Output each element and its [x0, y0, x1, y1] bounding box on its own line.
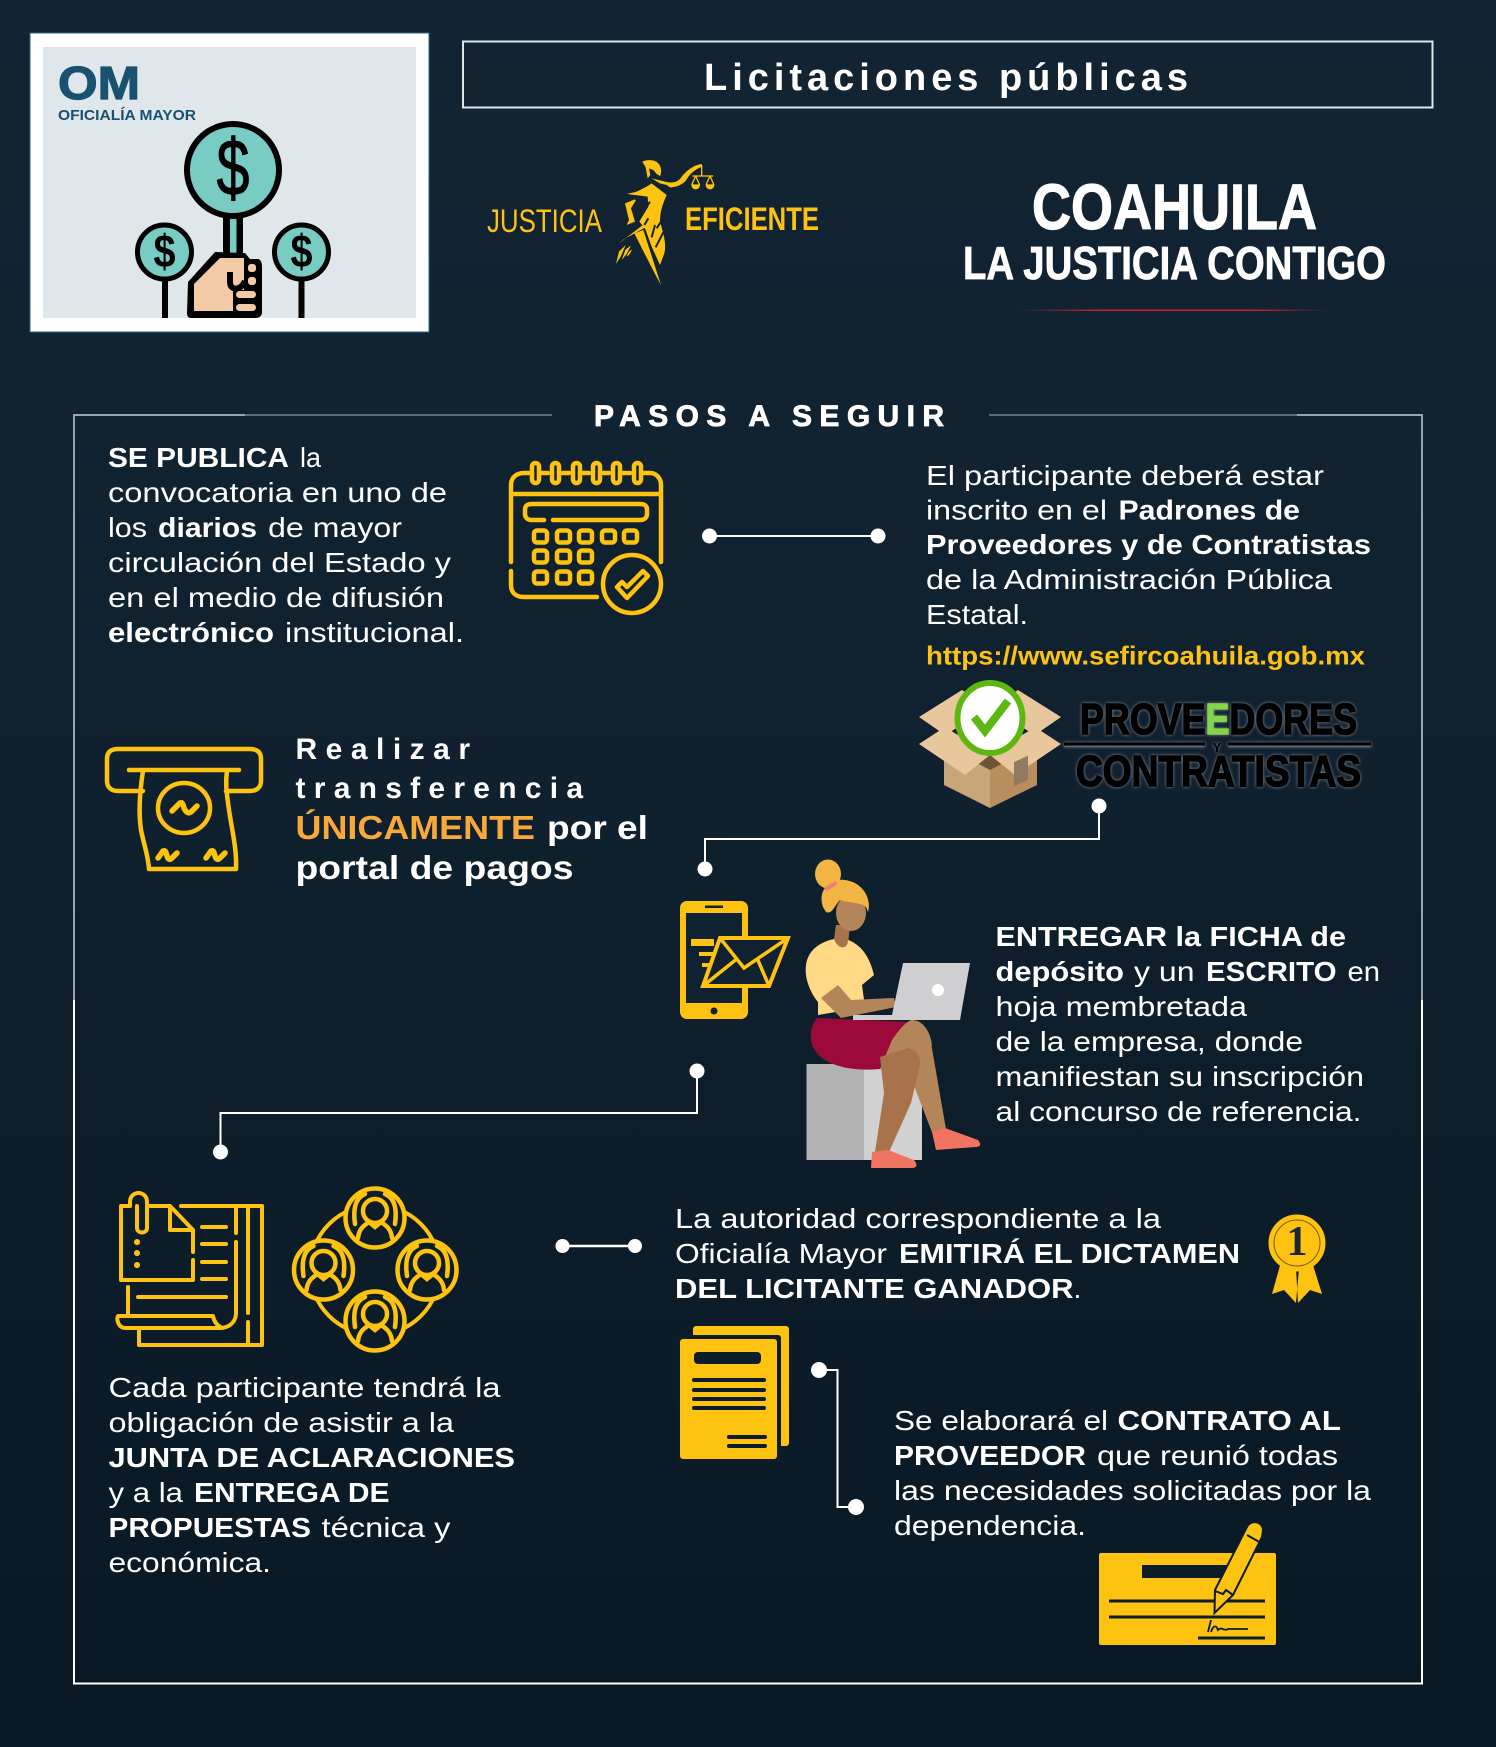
- text: contrato: [894, 1405, 1371, 1541]
- icon: lady justice: [616, 160, 714, 285]
- icon: proveedores box: [919, 683, 1061, 808]
- title box: [463, 42, 1432, 108]
- text: cada participante: ENTREGA DE: [194, 1477, 390, 1508]
- text: cada participante: económica.: [108, 1547, 271, 1578]
- panel: logo card: [30, 33, 429, 332]
- text: contrato: que reunió todas: [1097, 1440, 1338, 1471]
- text: realizar transferencia: transferencia: [296, 772, 583, 805]
- logo: proveedores y contratistas: Y: [1213, 740, 1222, 755]
- text: cada participante: PROPUESTAS: [108, 1512, 311, 1543]
- heading: Coahuila la justicia contigo: COAHUILA: [1032, 171, 1317, 243]
- icon: contract signature: [1099, 1522, 1276, 1645]
- OM logo text: OFICIALÍA MAYOR: [58, 107, 196, 124]
- icon: hand holding dollar signs: $: [216, 123, 250, 212]
- text: cada participante: y a la: [108, 1477, 183, 1508]
- icon: hand holding dollar signs: $: [290, 225, 312, 277]
- OM logo text: [58, 57, 196, 124]
- heading: pasos a seguir: PASOS A SEGUIR: [594, 400, 944, 433]
- text: se publica: en el medio de difusión: [108, 582, 444, 613]
- text: dictamen: EMITIRÁ EL DICTAMEN: [899, 1238, 1240, 1269]
- text: se publica: [108, 442, 464, 648]
- text: padrones: El participante deberá estar: [926, 460, 1324, 491]
- text: entregar ficha: de la empresa, donde: [996, 1026, 1303, 1057]
- text: entregar ficha: al concurso de referencia.: [996, 1096, 1362, 1127]
- arrow: connector 3: [213, 1064, 704, 1160]
- panel: pasos a seguir frame: [74, 415, 1422, 1684]
- text: contrato: Se elaborará el: [894, 1405, 1108, 1436]
- text: dictamen: .: [1074, 1273, 1081, 1304]
- link: https://www.sefircoahuila.gob.mx: [926, 640, 1366, 670]
- text: cada participante: Cada participante tendrá la: [108, 1372, 501, 1403]
- OM logo text: OM: [58, 57, 140, 109]
- text: dictamen: La autoridad correspondiente a la: [675, 1203, 1161, 1234]
- text: cada participante: [108, 1372, 515, 1578]
- text: se publica: los: [108, 512, 147, 543]
- logo: proveedores y contratistas: PROVEEDORES: [1080, 695, 1357, 744]
- text: realizar transferencia: Realizar: [296, 733, 470, 766]
- text: dictamen: Oficialía Mayor: [675, 1238, 887, 1269]
- text: se publica: de mayor: [268, 512, 402, 543]
- text: entregar ficha: en: [1348, 956, 1380, 987]
- text: padrones: [926, 460, 1371, 670]
- text: contrato: CONTRATO AL: [1118, 1405, 1341, 1436]
- text: entregar ficha: y un: [1134, 956, 1194, 987]
- text: se publica: institucional.: [285, 617, 464, 648]
- icon: first place medal: 1: [1286, 1219, 1308, 1265]
- arrow: connector 2: [698, 798, 1106, 876]
- icon: first place medal: [1271, 1217, 1323, 1303]
- text: padrones: inscrito en el: [926, 494, 1107, 526]
- text: realizar transferencia: ÚNICAMENTE: [296, 809, 535, 846]
- illustration: woman with laptop: [806, 860, 980, 1168]
- text: contrato: PROVEEDOR: [894, 1440, 1086, 1471]
- text: entregar ficha: [996, 921, 1380, 1127]
- text: cada participante: JUNTA DE ACLARACIONES: [108, 1442, 515, 1473]
- icon: phone with envelope: [680, 901, 788, 1019]
- icon: hand holding dollar signs: [138, 123, 328, 318]
- heading: Coahuila la justicia contigo: LA JUSTICIA CONTIGO: [963, 237, 1386, 289]
- text: se publica: diarios: [158, 512, 257, 543]
- logo: proveedores y contratistas: CONTRATISTAS: [1076, 747, 1361, 796]
- text: contrato: las necesidades solicitadas por la: [894, 1475, 1371, 1506]
- text: se publica: electrónico: [108, 617, 274, 648]
- text: realizar transferencia: portal de pagos: [296, 849, 574, 886]
- arrow: connector 4: [556, 1239, 642, 1253]
- arrow: connector 1: [702, 528, 886, 544]
- icon: calendar: [511, 463, 661, 613]
- text: padrones: Proveedores y de Contratistas: [926, 529, 1371, 560]
- text: realizar transferencia: [296, 733, 648, 886]
- text: se publica: convocatoria en uno de: [108, 477, 447, 508]
- text: dictamen: [675, 1203, 1240, 1304]
- text: entregar ficha: manifiestan su inscripción: [996, 1061, 1364, 1092]
- icon: atm money: [107, 749, 261, 869]
- text: padrones: Padrones de: [1118, 494, 1300, 526]
- logo: proveedores y contratistas: [1064, 695, 1371, 796]
- logo: justicia eficiente: [487, 160, 819, 285]
- text: padrones: Estatal.: [926, 599, 1028, 630]
- text: entregar ficha: ESCRITO: [1206, 956, 1336, 987]
- text: se publica: SE PUBLICA: [108, 442, 289, 473]
- icon: paper stack: [677, 1326, 789, 1463]
- logo: justicia eficiente: EFICIENTE: [685, 201, 819, 237]
- icon: documents: [117, 1193, 262, 1345]
- icon: four participants: [294, 1188, 456, 1350]
- text: contrato: dependencia.: [894, 1510, 1086, 1541]
- text: entregar ficha: hoja membretada: [996, 991, 1247, 1022]
- text: entregar ficha: depósito: [996, 956, 1124, 987]
- logo: justicia eficiente: JUSTICIA: [487, 203, 603, 239]
- text: se publica: circulación del Estado y: [108, 547, 451, 578]
- text: realizar transferencia: por el: [547, 809, 648, 846]
- heading: Coahuila la justicia contigo: [963, 171, 1386, 311]
- icon: hand holding dollar signs: $: [154, 225, 176, 277]
- text: dictamen: DEL LICITANTE GANADOR: [675, 1273, 1074, 1304]
- title box: Licitaciones públicas: [704, 57, 1188, 99]
- text: se publica: la: [300, 442, 321, 473]
- text: cada participante: obligación de asistir a la: [108, 1407, 454, 1438]
- text: padrones: de la Administración Pública: [926, 564, 1332, 595]
- text: entregar ficha: ENTREGAR la FICHA de: [996, 921, 1346, 952]
- arrow: connector 5: [811, 1362, 864, 1515]
- text: cada participante: técnica y: [322, 1512, 450, 1543]
